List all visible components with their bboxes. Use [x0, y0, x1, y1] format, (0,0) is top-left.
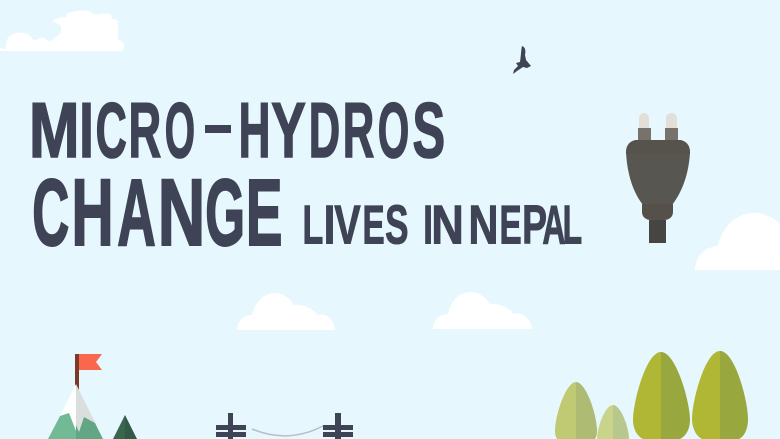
- title line: micro-hydros: [29, 88, 445, 174]
- title line: change: H: [72, 160, 114, 266]
- title line: lives in nepal: E: [362, 194, 385, 256]
- bird: [513, 46, 531, 74]
- cloud: centre left: [237, 293, 335, 330]
- cloud: centre right: [433, 292, 532, 329]
- title line: lives in nepal: S: [385, 194, 408, 256]
- pylon left: [216, 413, 246, 439]
- title line: micro-hydros: M: [29, 88, 80, 174]
- title: [29, 88, 582, 266]
- title line: micro-hydros: I: [79, 88, 94, 174]
- title line: lives in nepal: [302, 194, 582, 256]
- title line: change: A: [117, 160, 156, 266]
- title line: lives in nepal: L: [302, 194, 323, 256]
- cloud: right edge: [695, 213, 780, 270]
- trees: olive: [633, 351, 748, 439]
- title line: micro-hydros: O: [378, 88, 409, 174]
- title line: lives in nepal: N: [431, 194, 464, 256]
- cloud: top left: [0, 10, 124, 51]
- title line: lives in nepal: N: [468, 194, 498, 256]
- title line: micro-hydros: H: [239, 88, 270, 174]
- title line: change: [32, 160, 283, 266]
- flag on mountain: [75, 354, 102, 400]
- title line: lives in nepal: P: [522, 194, 547, 256]
- wire: [252, 426, 323, 436]
- title line: lives in nepal: E: [500, 194, 522, 256]
- title line: change: G: [205, 160, 245, 266]
- icon: electric plug: [626, 113, 690, 243]
- title line: micro-hydros: R: [343, 88, 374, 174]
- title line: change: E: [246, 160, 282, 266]
- trees: pale olive: [555, 382, 629, 439]
- title line: micro-hydros: S: [412, 88, 445, 174]
- title line: lives in nepal: A: [542, 194, 566, 256]
- power line: [216, 413, 353, 439]
- title line: change: N: [158, 160, 205, 266]
- title line: lives in nepal: I: [324, 194, 335, 256]
- title line: micro-hydros: R: [128, 88, 161, 174]
- title line: micro-hydros: O: [165, 88, 195, 174]
- title line: lives in nepal: L: [563, 194, 582, 256]
- title line: lives in nepal: I: [423, 194, 433, 256]
- title line: micro-hydros: Y: [271, 88, 306, 174]
- title line: micro-hydros: D: [309, 88, 340, 174]
- tree: dark green pine: [113, 415, 137, 439]
- title line: lives in nepal: V: [334, 194, 361, 256]
- pylon right: [323, 413, 353, 439]
- mountain: [48, 384, 103, 439]
- title line: micro-hydros: C: [96, 88, 127, 174]
- title line: change: C: [32, 160, 69, 266]
